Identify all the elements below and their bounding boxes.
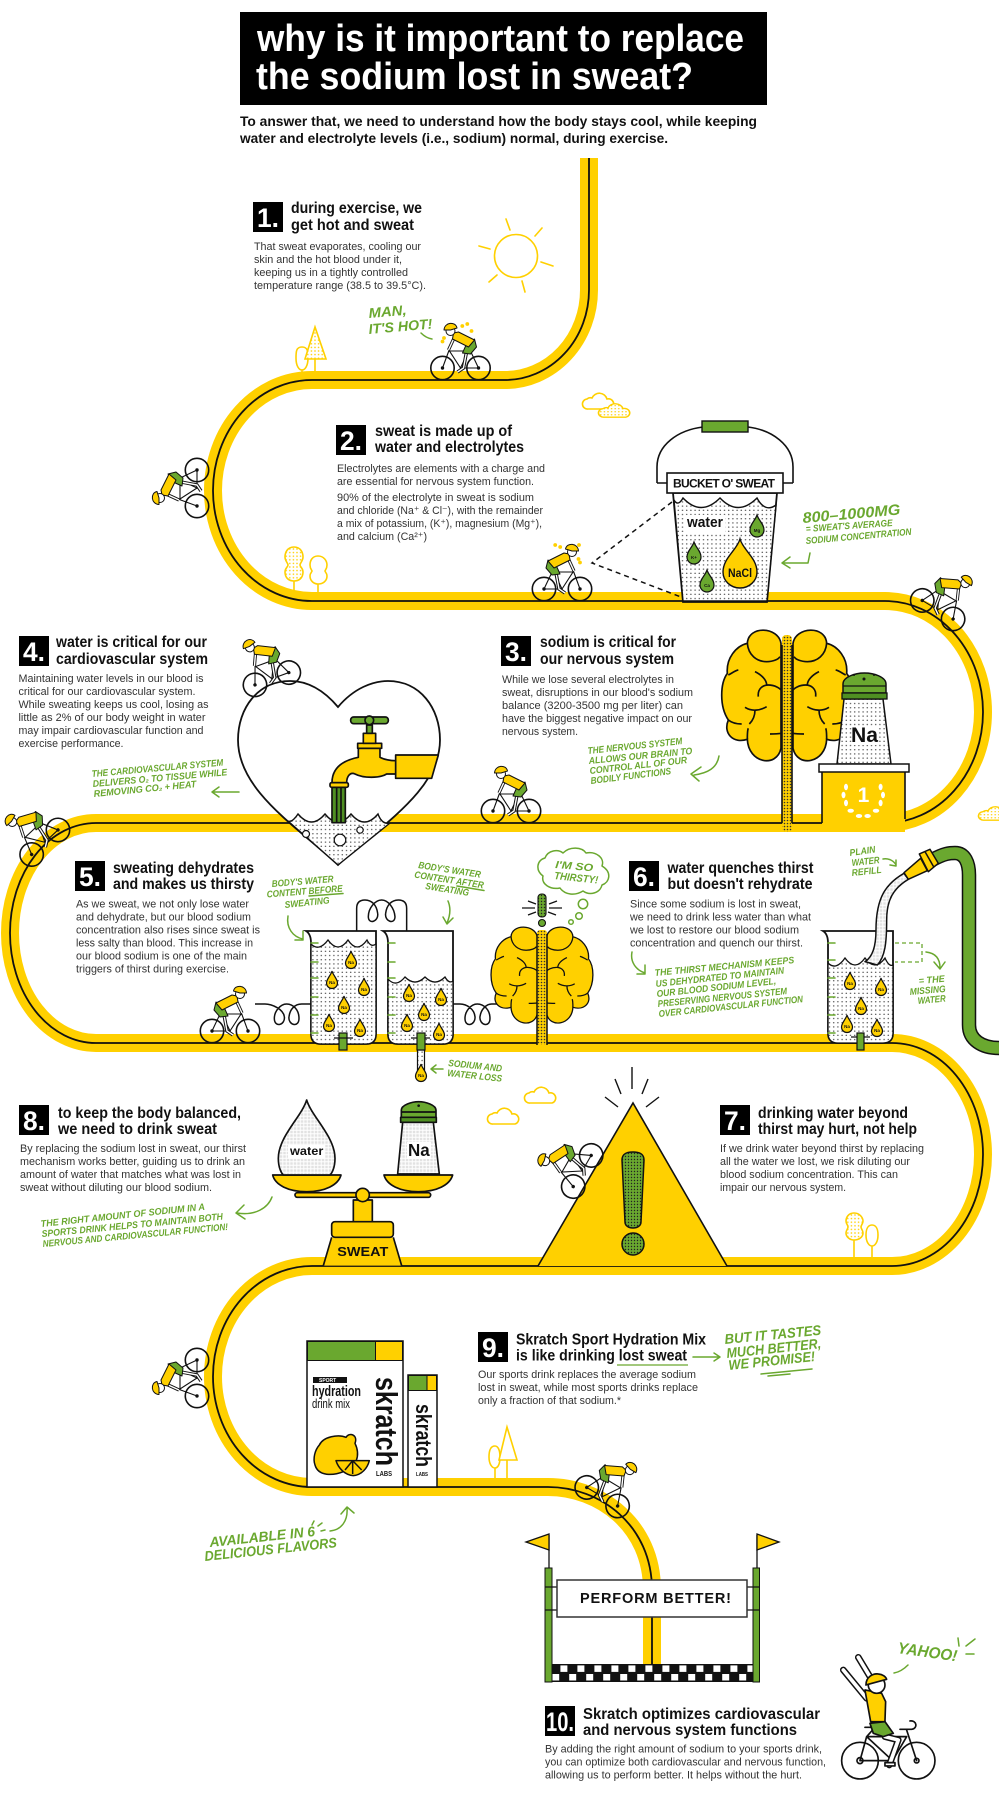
warning triangle — [538, 1067, 727, 1266]
beaker refill: Na — [844, 1024, 850, 1029]
callout: missing water: MISSING — [909, 984, 947, 998]
step 4 text: exercise performance. — [18, 738, 124, 750]
dashed zoom lines — [592, 502, 681, 597]
callout: nervous system: CONTROL ALL OF OUR — [589, 755, 688, 777]
beakers with sodium drops: Na — [438, 997, 444, 1002]
step 5 text — [75, 860, 260, 976]
step 8 text: amount of water that matches what was lost in — [20, 1169, 241, 1181]
step 2 text — [336, 423, 545, 543]
step 10 text: By adding the right amount of sodium to your sports drink, — [545, 1744, 822, 1756]
sports drink packages: LABS — [416, 1472, 429, 1478]
sports drink packages: drink mix — [312, 1396, 350, 1411]
step 5 text: triggers of thirst during exercise. — [76, 964, 229, 976]
cyclist celebrating — [842, 1657, 935, 1779]
step 8 text — [19, 1105, 246, 1194]
callout: before sweating: SWEATING — [284, 895, 331, 911]
callout: plain water refill: PLAIN — [849, 844, 877, 859]
step 3 text: balance (3200-3500 mg per liter) can — [502, 700, 683, 712]
bucket of sweat: K+ — [691, 555, 697, 560]
step 2 text: are essential for nervous system function. — [337, 476, 534, 488]
beakers with sodium drops: Na — [357, 1028, 363, 1033]
salt shaker on podium — [819, 673, 909, 832]
step 1 text: during exercise, we — [291, 200, 422, 217]
cyclist 9 — [529, 1123, 607, 1203]
sports drink packages: SPORT — [319, 1378, 336, 1384]
salt shaker on podium: Na — [851, 724, 878, 747]
step 6 text — [629, 860, 814, 950]
balance scale — [273, 1100, 453, 1266]
cyclist 7 — [0, 789, 75, 871]
beakers with sodium drops: Na — [404, 1023, 410, 1028]
callout: cardiovascular: REMOVING CO₂ + HEAT — [93, 779, 198, 800]
step 5 text: 5. — [79, 862, 101, 892]
callout: plain water refill: WATER — [851, 855, 880, 869]
step 9 text: only a fraction of that sodium.* — [478, 1395, 622, 1407]
step 6 text: water quenches thirst — [667, 860, 814, 877]
step 4 text: little as 2% of our body weight in water — [18, 712, 206, 724]
step 2 text: Electrolytes are elements with a charge and — [337, 463, 545, 475]
callout: man it's hot: IT'S HOT! — [368, 315, 433, 337]
bucket of sweat: NaCl — [728, 566, 752, 580]
step 4 text: Maintaining water levels in our blood is — [18, 673, 204, 685]
step 7 text: drinking water beyond — [758, 1105, 908, 1122]
step 1 text: 1. — [257, 203, 279, 233]
sports drink packages: LABS — [376, 1471, 392, 1478]
step 6 text: 6. — [633, 862, 655, 892]
clouds step 2 — [582, 393, 630, 417]
callout: after sweating: BODY'S WATER — [418, 860, 482, 881]
step 2 text: 90% of the electrolyte in sweat is sodium — [337, 492, 534, 504]
step 5 text: As we sweat, we not only lose water — [76, 898, 249, 910]
sports drink packages: hydration — [312, 1383, 361, 1400]
cloud right edge — [978, 807, 999, 820]
step 7 text: all the water we lost, we risk diluting our — [720, 1156, 910, 1168]
step 1 text: temperature range (38.5 to 39.5°C). — [254, 280, 426, 292]
step 2 text: water and electrolytes — [374, 439, 524, 456]
callout: before sweating — [266, 874, 344, 940]
title: the sodium lost in sweat? — [256, 56, 693, 98]
step 1 text: keeping us in a tightly controlled — [254, 267, 408, 279]
step 7 text: impair our nervous system. — [720, 1182, 846, 1194]
callout: yahoo: YAHOO! — [896, 1640, 959, 1665]
callout: sodium concentration: 800–1000MG — [802, 501, 901, 527]
step 9 text: Our sports drink replaces the average sodium — [478, 1369, 696, 1381]
step 7 text: blood sodium concentration. This can — [720, 1169, 898, 1181]
callout: missing water — [895, 943, 947, 1007]
step 6 text: we lost to restore our blood sodium — [629, 925, 799, 937]
beaker refill: Na — [874, 1028, 880, 1033]
callout: after sweating: SWEATING — [425, 881, 470, 899]
step 9 text — [478, 1332, 706, 1407]
step 4 text: critical for our cardiovascular system. — [18, 686, 196, 698]
step 2 text: 2. — [340, 426, 362, 456]
step 4 text: may impair cardiovascular function and — [18, 725, 204, 737]
callout: missing water: = THE — [918, 974, 946, 987]
step 7 text: 7. — [724, 1106, 746, 1136]
callout: nervous system: ALLOWS OUR BRAIN TO — [587, 746, 693, 767]
step 8 text: 8. — [23, 1106, 45, 1136]
callout: sodium concentration: = SWEAT'S AVERAGE — [805, 518, 894, 535]
callout: tastes better: WE PROMISE! — [728, 1348, 816, 1373]
beakers with sodium drops: Na — [418, 1073, 424, 1078]
trees step 2 — [285, 547, 327, 596]
step 10 text: you can optimize both cardiovascular and nervous function, — [545, 1757, 826, 1769]
step 6 text: Since some sodium is lost in sweat, — [630, 898, 801, 910]
step 3 text: have the biggest negative impact on our — [502, 713, 692, 725]
step 10 text: 10. — [546, 1707, 574, 1737]
callout: yahoo — [894, 1638, 975, 1673]
callout: sodium and water loss: WATER LOSS — [447, 1068, 503, 1085]
sports drink packages: skratch — [411, 1404, 436, 1467]
callout: available flavors: DELICIOUS FLAVORS — [204, 1534, 338, 1564]
thought cloud: I'm so thirsty — [538, 848, 609, 924]
beaker refill: Na — [847, 981, 853, 986]
bucket of sweat: Mg — [754, 528, 760, 533]
callout: right amount of sodium: SPORTS DRINK HELPS TO MAINTAIN BOTH — [41, 1211, 224, 1240]
beakers with sodium drops: Na — [436, 1032, 442, 1037]
trees step 7 — [846, 1213, 878, 1258]
heart with faucet — [238, 681, 440, 865]
step 2 text: and calcium (Ca²⁺) — [337, 531, 427, 543]
balance scale: SWEAT — [337, 1244, 388, 1259]
step 9 text: Skratch Sport Hydration Mix — [516, 1332, 706, 1349]
step 3 text: 3. — [505, 637, 527, 667]
callout: thirst mechanism — [632, 952, 804, 1020]
step 10 text: and nervous system functions — [583, 1722, 797, 1739]
callout: tastes better: BUT IT TASTES — [724, 1322, 822, 1347]
sports drink packages: skratch — [369, 1377, 404, 1466]
cyclist 1 — [431, 322, 490, 380]
balance scale: Na — [408, 1140, 430, 1160]
step 3 text: nervous system. — [502, 726, 578, 738]
step 8 text: By replacing the sodium lost in sweat, our thirst — [20, 1143, 246, 1155]
thought cloud: I'm so thirsty: THIRSTY! — [554, 870, 599, 887]
callout: sodium and water loss — [431, 1058, 503, 1085]
intro text: To answer that, we need to understand how the body stays cool, while keeping — [240, 113, 757, 129]
step 9 text: 9. — [482, 1333, 504, 1363]
beaker refill: Na — [858, 1006, 864, 1011]
step 5 text: sweating dehydrates — [113, 860, 254, 877]
beakers with sodium drops: Na — [406, 993, 412, 998]
step 5 text: and dehydrate, but our blood sodium — [76, 912, 251, 924]
callout: sodium and water loss: SODIUM AND — [448, 1058, 503, 1075]
step 3 text: sweat, disruptions in our blood's sodium — [502, 687, 693, 699]
step 8 text: sweat without diluting our blood sodium. — [20, 1182, 212, 1194]
beakers with sodium drops: Na — [421, 1012, 427, 1017]
step 3 text — [501, 634, 693, 738]
step 7 text — [720, 1105, 924, 1194]
brain on road — [722, 630, 852, 832]
callout: thirst mechanism: OVER CARDIOVASCULAR FUNCTION — [658, 994, 804, 1020]
green hose — [932, 853, 999, 1048]
step 2 text: sweat is made up of — [375, 423, 513, 440]
bucket of sweat: Ca — [704, 583, 710, 588]
title — [240, 12, 767, 105]
beaker refill: Na — [878, 987, 884, 992]
step 9 text: is like drinking lost sweat — [516, 1348, 687, 1365]
step 4 text — [18, 634, 209, 750]
trees step 9 — [489, 1427, 517, 1480]
beakers with sodium drops — [255, 900, 498, 1082]
step 4 text: While sweating keeps us cool, losing as — [18, 699, 209, 711]
callout: nervous system — [587, 736, 719, 787]
salt shaker on podium: 1 — [858, 784, 870, 807]
step 4 text: water is critical for our — [55, 634, 207, 651]
beakers with sodium drops: Na — [361, 987, 367, 992]
step 10 text — [545, 1706, 826, 1782]
bucket of sweat: water — [686, 514, 723, 531]
finish line — [526, 1534, 779, 1682]
trees step 1 — [296, 327, 326, 372]
bucket of sweat: BUCKET O' SWEAT — [673, 476, 776, 490]
sports drink packages — [307, 1341, 437, 1487]
finish line: PERFORM BETTER! — [580, 1591, 731, 1607]
step 5 text: less salty than blood. This increase in — [76, 938, 253, 950]
cyclist 11 — [571, 1443, 651, 1522]
step 6 text: concentration and quench our thirst. — [630, 938, 803, 950]
step 8 text: to keep the body balanced, — [58, 1105, 241, 1122]
callout: plain water refill: REFILL — [851, 865, 882, 879]
beakers with sodium drops: Na — [348, 960, 354, 965]
cyclist 5 — [229, 627, 304, 700]
beakers with sodium drops: Na — [329, 980, 335, 985]
step 2 text: and chloride (Na⁺ & Cl⁻), with the remainder — [337, 505, 543, 517]
step 5 text: concentration also rises since sweat is — [76, 925, 260, 937]
step 1 text — [253, 200, 426, 292]
callout: available flavors — [204, 1507, 354, 1564]
cyclist 3 — [532, 543, 592, 601]
callout: right amount of sodium — [40, 1197, 272, 1250]
title: why is it important to replace — [256, 18, 744, 60]
thought cloud: I'm so thirsty: I'M SO — [555, 859, 594, 874]
step 4 text: 4. — [23, 637, 45, 667]
beakers with sodium drops: Na — [326, 1023, 332, 1028]
callout: sodium concentration: SODIUM CONCENTRATION — [805, 527, 913, 547]
step 10 text: Skratch optimizes cardiovascular — [583, 1706, 820, 1723]
callout: tastes better — [693, 1322, 822, 1376]
step 8 text: we need to drink sweat — [57, 1121, 217, 1138]
callout: right amount of sodium: THE RIGHT AMOUNT OF SODIUM IN A — [40, 1202, 206, 1230]
callout: missing water: WATER — [917, 994, 946, 1007]
callout: plain water refill — [849, 844, 896, 879]
step 9 text: lost in sweat, while most sports drinks replace — [478, 1382, 698, 1394]
pipes between — [255, 900, 498, 1024]
step 1 text: That sweat evaporates, cooling our — [254, 241, 421, 253]
step 3 text: sodium is critical for — [540, 634, 676, 651]
step 7 text: thirst may hurt, not help — [758, 1121, 917, 1138]
cyclist 2 — [152, 458, 209, 518]
callout: before sweating: BODY'S WATER — [271, 874, 334, 890]
callout: after sweating: CONTENT AFTER — [414, 870, 485, 891]
bucket of sweat — [657, 421, 793, 602]
callout: cardiovascular: DELIVERS O₂ TO TISSUE WHILE — [92, 767, 228, 790]
thirsty brain — [491, 894, 593, 1045]
callout: thirst mechanism: THE THIRST MECHANISM KEEPS — [654, 955, 795, 979]
step 2 text: a mix of potassium, (K⁺), magnesium (Mg⁺), — [337, 518, 542, 530]
callout: thirst mechanism: PRESERVING NERVOUS SYSTEM — [657, 986, 789, 1010]
step 3 text: our nervous system — [540, 651, 674, 668]
step 5 text: our blood sodium is one of the main — [76, 951, 247, 963]
beakers with sodium drops: Na — [341, 1005, 347, 1010]
callout: before sweating: CONTENT BEFORE — [266, 884, 344, 900]
step 1 text: skin and the hot blood under it, — [254, 254, 402, 266]
step 1 text: get hot and sweat — [291, 217, 414, 234]
step 6 text: but doesn't rehydrate — [668, 876, 813, 893]
callout: cardiovascular — [91, 757, 239, 800]
step 4 text: cardiovascular system — [56, 651, 208, 668]
cyclist 6 — [481, 766, 541, 823]
callout: thirst mechanism: OUR BLOOD SODIUM LEVEL, — [656, 976, 777, 1000]
callout: after sweating — [414, 860, 485, 924]
callout: nervous system: THE NERVOUS SYSTEM — [587, 736, 684, 757]
step 7 text: If we drink water beyond thirst by replacing — [720, 1143, 924, 1155]
callout: right amount of sodium: NERVOUS AND CARDIOVASCULAR FUNCTION! — [42, 1222, 228, 1250]
callout: tastes better: MUCH BETTER, — [726, 1335, 822, 1361]
callout: nervous system: BODILY FUNCTIONS — [590, 766, 672, 787]
beaker refill — [823, 849, 938, 1050]
cyclist 8 — [200, 986, 260, 1043]
step 3 text: While we lose several electrolytes in — [502, 674, 674, 686]
callout: available flavors: AVAILABLE IN 6 — [208, 1523, 316, 1550]
cyclist 4 — [906, 556, 986, 635]
callout: sodium concentration — [782, 501, 913, 568]
step 8 text: mechanism works better, guiding us to drink an — [20, 1156, 245, 1168]
step 10 text: allowing us to perform better. It helps without the hurt. — [545, 1770, 802, 1782]
callout: man it's hot: MAN, — [368, 302, 407, 321]
intro text — [239, 113, 757, 146]
callout: man it's hot — [368, 302, 433, 339]
balance scale: water — [289, 1144, 324, 1158]
clouds step 7 — [487, 1087, 556, 1124]
icon: sun — [479, 219, 553, 292]
step 6 text: we need to drink less water than what — [629, 912, 811, 924]
cyclist 10 — [152, 1348, 209, 1408]
callout: thirst mechanism: US DEHYDRATED TO MAINTAIN — [655, 965, 786, 990]
callout: cardiovascular: THE CARDIOVASCULAR SYSTEM — [91, 757, 225, 780]
intro text: water and electrolyte levels (i.e., sodium) normal, during exercise. — [239, 130, 668, 146]
step 5 text: and makes us thirsty — [113, 876, 254, 893]
